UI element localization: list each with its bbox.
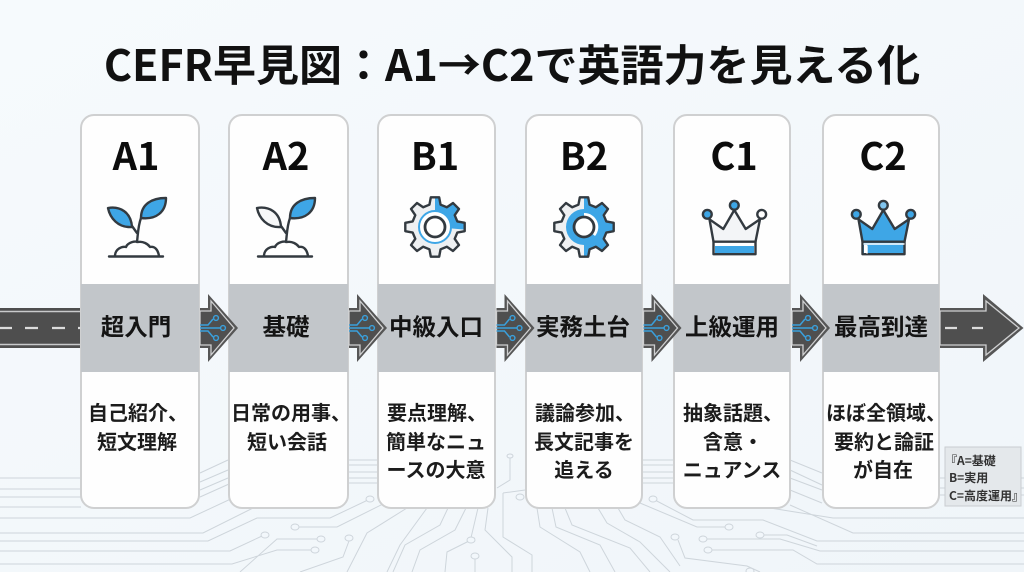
label: 超入門: 超入門 [101, 308, 171, 342]
arrow: C1 to C2 [792, 294, 830, 362]
legend note [945, 447, 1024, 506]
description: C2: が自在 [853, 454, 913, 483]
heading: C1: C1 [710, 126, 758, 181]
description: B2 [534, 397, 635, 483]
description: B1 [386, 397, 487, 483]
level band: A1 [81, 284, 199, 372]
level band: B2 [526, 284, 642, 372]
panel: C2 [823, 115, 946, 508]
arrow: road exit [940, 294, 1024, 362]
label: 上級運用: 上級運用 [685, 308, 779, 342]
description: C1: 含意・ [703, 426, 763, 455]
description: A1: 自己紹介、 [88, 397, 188, 426]
panel: A1 [81, 115, 199, 508]
arrow: A2 to B1 [349, 294, 387, 362]
description: C2: ほぼ全領域、 [826, 397, 946, 426]
description: B1: 簡単なニュ [386, 426, 486, 455]
heading: C2: C2 [859, 126, 907, 181]
arrow: A1 to A2 [200, 294, 238, 362]
label: 実務土台: 実務土台 [536, 308, 630, 342]
icon: gear quarter [405, 192, 470, 257]
panel: B2 [526, 115, 642, 508]
legend note: B=実用 [949, 469, 988, 486]
label: 最高到達: 最高到達 [834, 308, 928, 342]
icon: sprout half [257, 198, 315, 256]
arrow: B1 to B2 [496, 294, 534, 362]
description: C1: ニュアンス [683, 454, 781, 483]
description: C1: 抽象話題、 [683, 397, 783, 426]
description: C2 [826, 397, 946, 483]
heading: B1: B1 [411, 126, 459, 181]
description: C2: 要約と論証 [834, 426, 934, 455]
description: A2: 日常の用事、 [231, 397, 351, 426]
level band: C2 [823, 284, 939, 372]
panel: B1 [378, 115, 495, 508]
level band: A2 [229, 284, 348, 372]
arrow: B2 to C1 [644, 294, 682, 362]
description: B1: 要点理解、 [387, 397, 487, 426]
description: B2: 追える [554, 454, 614, 483]
label: 中級入口: 中級入口 [389, 308, 483, 342]
icon: crown outline [703, 201, 766, 254]
icon: sprout full [108, 198, 166, 256]
heading: B2: B2 [560, 126, 608, 181]
description: A1: 短文理解 [97, 426, 177, 455]
icon: gear half [553, 196, 615, 258]
legend note: 『A=基礎 [945, 452, 996, 469]
description: B2: 議論参加、 [535, 397, 635, 426]
description: C1 [683, 397, 783, 483]
heading: A2: A2 [262, 126, 309, 181]
description: A1 [88, 397, 188, 455]
description: B2: 長文記事を [534, 426, 634, 455]
icon: crown full [852, 201, 915, 254]
level band: B1 [378, 284, 495, 372]
description: B1: ースの大意 [386, 454, 486, 483]
label: 基礎: 基礎 [262, 308, 310, 342]
level band: C1 [674, 284, 790, 372]
legend note: C=高度運用』 [949, 487, 1024, 504]
road: left entry [0, 308, 82, 348]
title: CEFR早見図：A1→C2で英語力を見える化 [104, 32, 920, 94]
description: A2: 短い会話 [247, 426, 327, 455]
description: A2 [231, 397, 351, 455]
panel: A2 [229, 115, 351, 508]
heading: A1: A1 [112, 126, 159, 181]
panel: C1 [674, 115, 790, 508]
